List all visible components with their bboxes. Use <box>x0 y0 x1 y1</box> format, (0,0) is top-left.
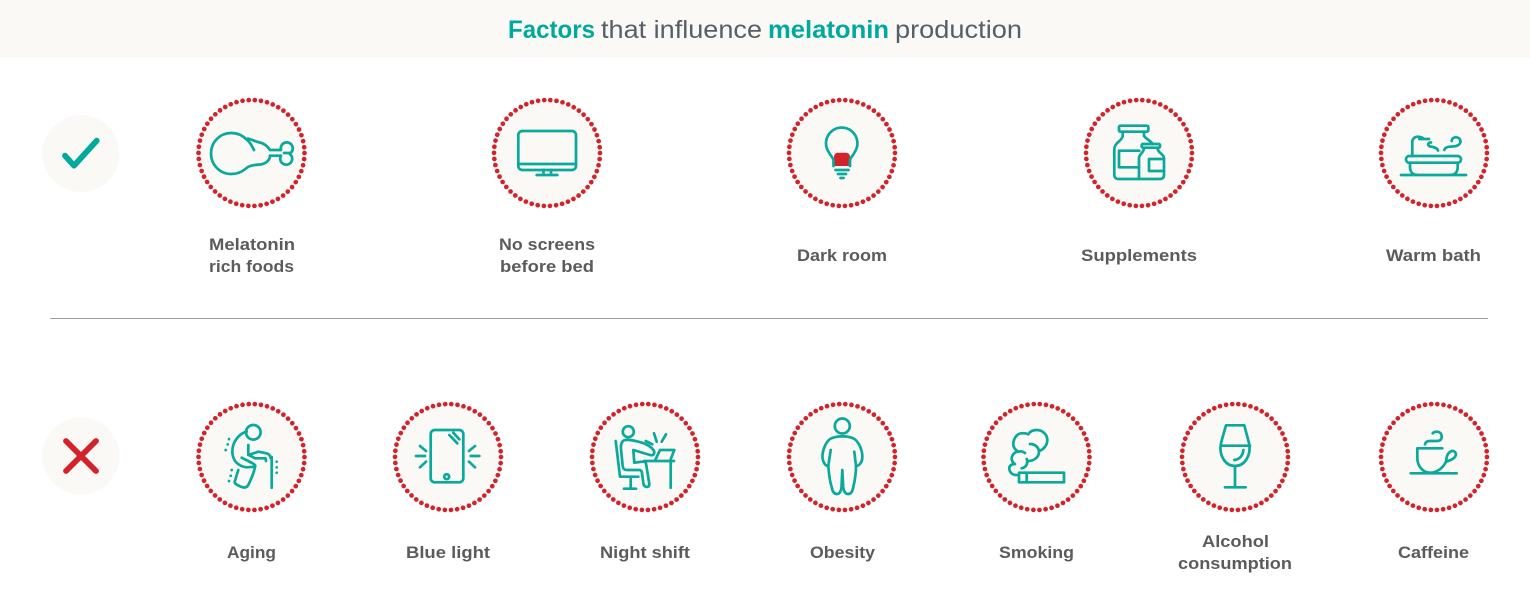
label: consumption <box>1178 554 1292 573</box>
icon: cross mark badge <box>42 418 120 494</box>
panel: factors that reduce melatonin <box>42 404 1487 573</box>
icon: monitor <box>518 131 576 175</box>
icon: chicken drumstick <box>211 133 293 174</box>
icon: elderly person with cane <box>226 425 277 488</box>
icon: cigarette with smoke <box>1009 430 1064 482</box>
item: alcohol consumption <box>1178 404 1292 573</box>
icon: smartphone <box>416 430 479 482</box>
icon: check mark badge <box>42 115 120 192</box>
label: Smoking <box>999 543 1074 562</box>
title banner <box>0 0 1530 58</box>
title: Factors <box>508 16 595 44</box>
item: blue light <box>395 404 501 562</box>
panel: factors that increase melatonin <box>42 100 1487 276</box>
title <box>508 16 1022 44</box>
item: no screens before bed <box>494 100 600 276</box>
label: Melatonin <box>209 235 295 254</box>
label <box>209 235 295 276</box>
label: Night shift <box>600 543 690 562</box>
icon: coffee cup <box>1411 432 1457 473</box>
label: Obesity <box>810 543 876 562</box>
divider <box>50 318 1488 319</box>
icon: overweight person <box>822 418 862 494</box>
icon: supplement jars <box>1114 126 1164 179</box>
icon: bathtub <box>1401 137 1466 175</box>
label: Supplements <box>1081 246 1197 265</box>
item: obesity <box>789 404 895 562</box>
title: that influence <box>601 16 762 44</box>
icon: light bulb <box>826 128 857 178</box>
item: warm bath <box>1381 100 1487 265</box>
item: dark room <box>789 100 895 265</box>
item: night shift <box>592 404 698 562</box>
item: aging <box>198 404 304 562</box>
label <box>1178 532 1292 573</box>
title: melatonin <box>768 16 889 44</box>
label: Warm bath <box>1386 246 1481 265</box>
item: melatonin rich foods <box>198 100 304 276</box>
icon: wine glass <box>1220 425 1250 487</box>
title: production <box>895 16 1022 44</box>
item: caffeine <box>1381 404 1487 562</box>
label: Alcohol <box>1202 532 1269 551</box>
label: before bed <box>500 257 594 276</box>
label: rich foods <box>209 257 294 276</box>
label: Aging <box>227 543 276 562</box>
label: No screens <box>499 235 595 254</box>
label: Caffeine <box>1398 543 1469 562</box>
label <box>499 235 595 276</box>
label: Dark room <box>797 246 887 265</box>
item: smoking <box>984 404 1090 562</box>
icon: person working at desk <box>616 426 674 489</box>
label: Blue light <box>406 543 490 562</box>
item: supplements <box>1081 100 1197 265</box>
